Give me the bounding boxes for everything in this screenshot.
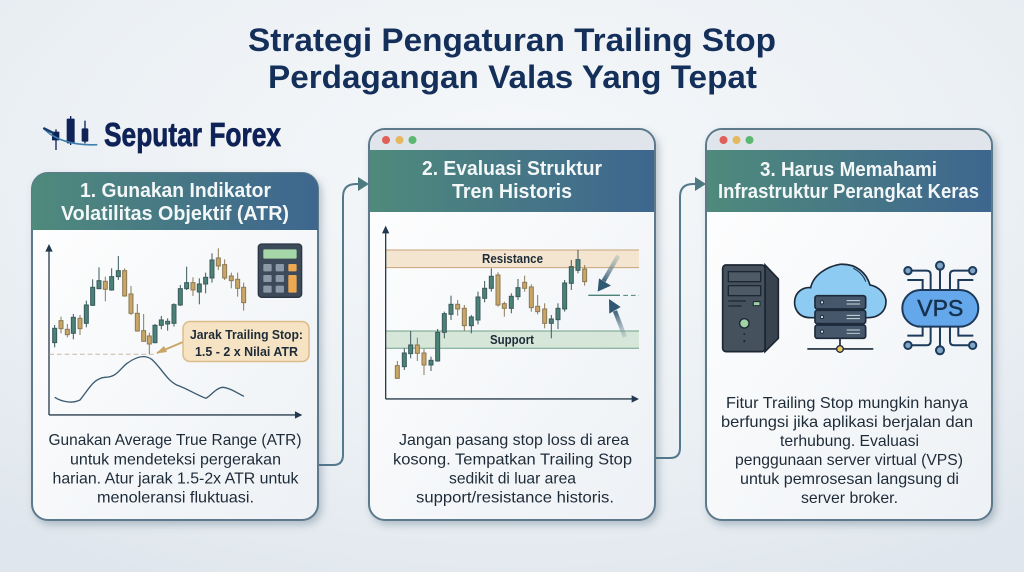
chart: support and resistance (382, 226, 639, 403)
arrowhead: card 1 to card 2 (358, 177, 369, 191)
icon: calculator (258, 244, 302, 297)
window bar with dots (370, 130, 654, 150)
step 2 header (370, 150, 654, 212)
step 2 text: support/resistance historis. (416, 490, 614, 506)
window bar with dots (707, 130, 991, 150)
label: resistance: Resistance (482, 252, 543, 266)
title: Perdagangan Valas Yang Tepat (268, 59, 757, 95)
callout: trailing stop distance (156, 322, 309, 362)
step 3 text: server broker. (801, 490, 898, 507)
arrowhead: card 2 to card 3 (695, 177, 706, 191)
chart: candlesticks with ATR (45, 244, 302, 419)
step 1 text: Gunakan Average True Range (ATR) (48, 432, 302, 449)
step 3 text: untuk pemrosesan langsung di (740, 471, 959, 488)
step 2 header: 2. Evaluasi Struktur (422, 157, 602, 180)
step 2 text: kosong. Tempatkan Trailing Stop (393, 452, 632, 468)
panel: step 2 (369, 129, 655, 520)
step 1 text: untuk mendeteksi pergerakan (70, 452, 281, 468)
step 1 text (48, 432, 302, 506)
step 3 text: berfungsi jika aplikasi berjalan dan (721, 414, 973, 431)
logo: Seputar Forex (43, 116, 282, 153)
title (248, 22, 776, 95)
icon: computer tower (723, 265, 778, 352)
step 3 header: 3. Harus Memahami (760, 158, 937, 181)
title: Strategi Pengaturan Trailing Stop (248, 22, 776, 58)
icon: cloud server (795, 264, 886, 352)
arrow: stop level from above (598, 256, 618, 292)
step 1 text: menoleransi fluktuasi. (97, 490, 254, 506)
arrow: stop level from below (609, 299, 625, 337)
logo: Seputar Forex: Seputar Forex (104, 116, 282, 153)
panel: step 1 (32, 173, 318, 520)
label: support: Support (490, 333, 535, 347)
callout: trailing stop distance: Jarak Trailing Stop: (190, 327, 303, 342)
step 3 header (707, 150, 991, 212)
step 3 header: Infrastruktur Perangkat Keras (718, 180, 979, 203)
step 1 header: 1. Gunakan Indikator (80, 179, 271, 202)
icon: VPS circuit: VPS (917, 295, 963, 321)
step 1 header: Volatilitas Objektif (ATR) (61, 202, 289, 225)
panel: step 3 (706, 129, 992, 520)
step 3 text: terhubung. Evaluasi (780, 433, 919, 450)
step 1 header (32, 173, 318, 230)
step 2 text: Jangan pasang stop loss di area (399, 432, 629, 449)
step 2 text (393, 432, 632, 506)
arrow: card 1 to card 2 (319, 184, 360, 465)
step 3 text: penggunaan server virtual (VPS) (735, 452, 963, 469)
step 2 header: Tren Historis (452, 180, 572, 203)
step 3 text (721, 395, 973, 507)
step 2 text: sedikit di luar area (449, 470, 576, 488)
callout: trailing stop distance: 1.5 - 2 x Nilai ATR (195, 344, 299, 359)
icon: VPS circuit (902, 262, 978, 354)
arrow: card 2 to card 3 (656, 184, 697, 458)
step 1 text: harian. Atur jarak 1.5-2x ATR untuk (52, 470, 299, 488)
step 3 text: Fitur Trailing Stop mungkin hanya (726, 395, 968, 412)
